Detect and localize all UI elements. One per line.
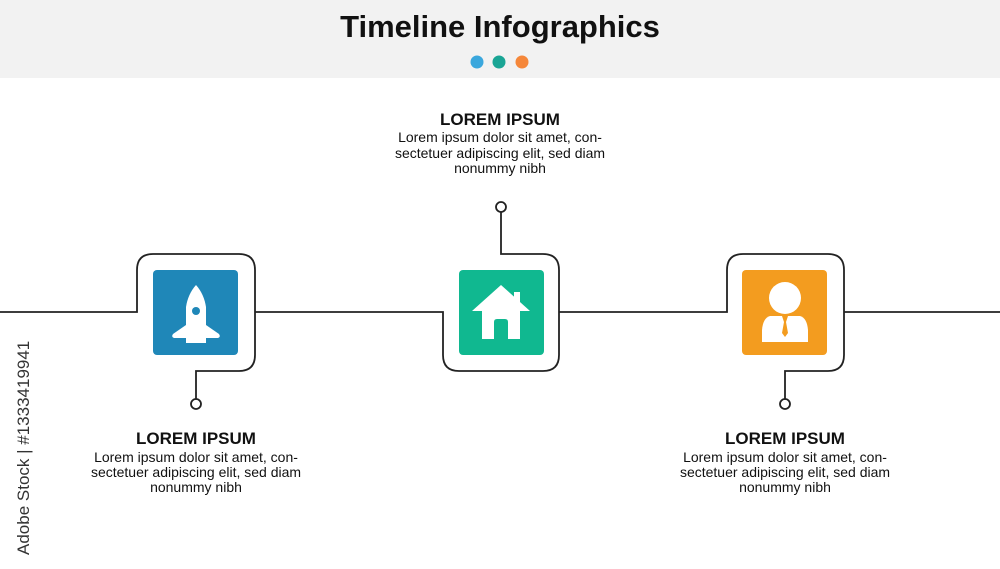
text block: right: Lorem ipsum dolor sit amet, con- xyxy=(683,449,887,465)
header band xyxy=(0,0,1000,78)
text block: top: nonummy nibh xyxy=(454,160,546,176)
timeline line xyxy=(0,212,1000,399)
icon: house xyxy=(459,270,544,355)
text block: left: nonummy nibh xyxy=(150,479,242,495)
connector circles xyxy=(191,202,790,409)
text block: left: LOREM IPSUM xyxy=(136,429,256,448)
icon: rocket xyxy=(153,270,238,355)
text block: top xyxy=(395,110,605,176)
text block: right: nonummy nibh xyxy=(739,479,831,495)
text block: top: sectetuer adipiscing elit, sed diam xyxy=(395,145,605,161)
watermark id: Adobe Stock | #1333419941 xyxy=(14,341,33,555)
color dots xyxy=(470,56,528,68)
text block: right: sectetuer adipiscing elit, sed diam xyxy=(680,464,890,480)
text block: left: Lorem ipsum dolor sit amet, con- xyxy=(94,449,298,465)
title: Timeline Infographics xyxy=(340,9,660,44)
text block: top: LOREM IPSUM xyxy=(440,110,560,129)
text block: right xyxy=(680,429,890,495)
icon: person xyxy=(742,270,827,355)
text block: left: sectetuer adipiscing elit, sed diam xyxy=(91,464,301,480)
text block: top: Lorem ipsum dolor sit amet, con- xyxy=(398,129,602,145)
text block: right: LOREM IPSUM xyxy=(725,429,845,448)
text block: left xyxy=(91,429,301,495)
